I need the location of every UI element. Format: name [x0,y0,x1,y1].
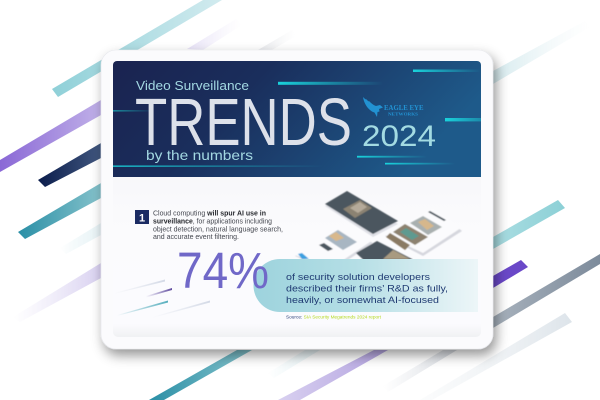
logo wordmark: EAGLE EYE [384,103,424,112]
phone: dark bottom [356,240,413,259]
phone: dark top [325,191,398,237]
header banner [113,61,505,177]
icon: eagle [363,97,383,117]
screen body panel [113,170,481,337]
header background [113,61,481,177]
logo subtitle: NETWORKS [388,112,418,117]
callout line 1: of security solution developers [286,272,430,283]
logo: Eagle Eye Networks [363,97,424,117]
illustration: isometric phones [296,190,462,259]
heading: by the numbers: by the numbers [146,147,253,163]
line 4: and accurate event filtering. [153,232,239,241]
header accent lines [113,70,505,167]
line 2: surveillance, for applications including [153,216,272,226]
blue device edge [298,253,309,259]
decorative streaks by statistic [114,280,210,318]
trend number badge: 1 [139,212,145,224]
callout line 3: heavily, or somewhat AI-focused [286,295,439,306]
callout pill [254,259,478,312]
source note: Source: SIA Security Megatrends 2024 report [286,314,382,320]
statistic: 74%: 74% [177,242,269,299]
heading: 2024: 2024 [362,120,436,153]
tablet card [101,50,493,349]
phone: white right [385,208,462,256]
phone: white left [296,230,373,259]
callout line 2: described their firms’ R&D as fully, [286,284,448,294]
heading: Video Surveillance: Video Surveillance [136,78,249,93]
trend description text [153,208,283,241]
callout text [286,272,448,306]
line 1: Cloud computing will spur AI use in [153,208,266,218]
line 3: object detection, natural language search, [153,224,283,234]
trend number badge [135,210,149,224]
heading: TRENDS: TRENDS [135,85,352,160]
